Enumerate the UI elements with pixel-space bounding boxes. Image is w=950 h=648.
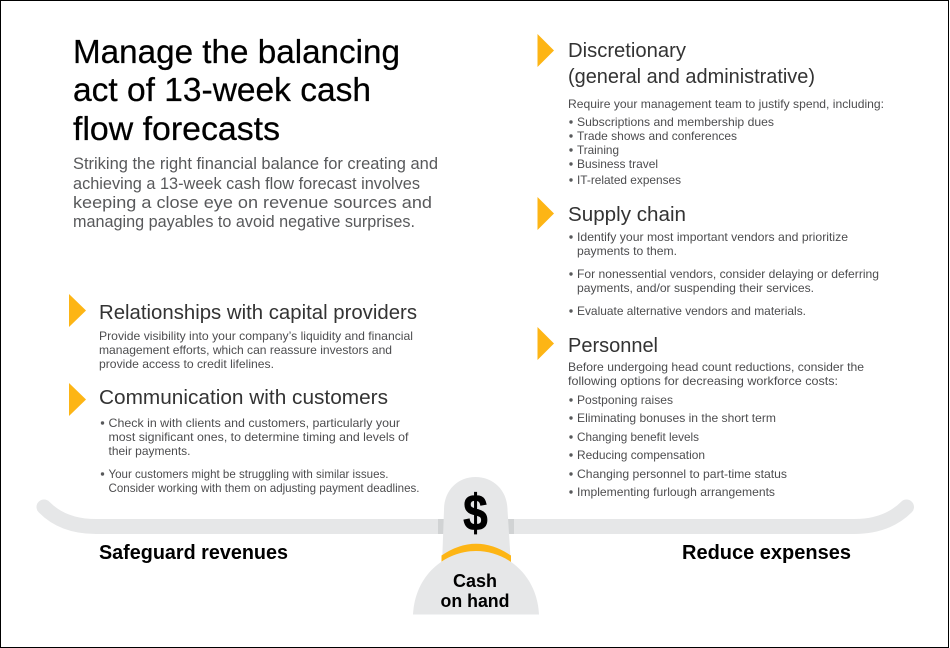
heading: relationships: Relationships with capital providers [99, 301, 417, 324]
text block: relationships: Provide visibility into your company’s liquidity and financial [99, 329, 413, 343]
beam shadow right [507, 519, 514, 534]
weight [442, 477, 511, 565]
text block: relationships: provide access to credit lifelines. [99, 357, 274, 371]
bullet list: discretionary [568, 97, 884, 187]
icon: arrow marker [69, 294, 86, 327]
bullet list: discretionary: Training [577, 143, 619, 157]
title: act of 13-week cash [73, 72, 371, 109]
bullet list: supply chain: payments, and/or suspending their services. [577, 281, 814, 295]
heading: discretionary [568, 39, 815, 88]
bullet list: personnel: Changing personnel to part-time status [577, 467, 787, 481]
heading: discretionary: Discretionary [568, 39, 687, 62]
title: Manage the balancing [73, 34, 400, 71]
bullet list: discretionary: IT-related expenses [577, 173, 681, 187]
balance beam [44, 507, 906, 526]
bullet list: supply chain [569, 230, 879, 318]
balance scale illustration [44, 477, 906, 614]
fulcrum label: on hand [440, 591, 510, 611]
bullet list: communication [101, 416, 420, 495]
bullet list: personnel: Postponing raises [577, 393, 673, 407]
heading: communication: Communication with customers [99, 386, 388, 409]
bullet list: personnel: Before undergoing head count reductions, consider the [568, 360, 864, 374]
label: safeguard revenues: Safeguard revenues [99, 542, 288, 564]
bullet list: communication: Consider working with them on adjusting payment deadlines. [108, 481, 420, 495]
title: flow forecasts [73, 111, 280, 148]
beam shadow left [438, 519, 445, 534]
bullet list: communication: most significant ones, to determine timing and levels of [108, 430, 409, 444]
bullet list: personnel: Reducing compensation [577, 448, 705, 462]
bullet list: personnel: Eliminating bonuses in the short term [577, 411, 776, 425]
icon: arrow marker [538, 34, 554, 67]
bullet list: personnel: following options for decreasing workforce costs: [568, 374, 838, 388]
bullet list: discretionary: Business travel [577, 157, 658, 171]
bullet list: supply chain: Identify your most important vendors and prioritize [577, 230, 848, 244]
bullet list: supply chain: For nonessential vendors, consider delaying or deferring [577, 267, 879, 281]
icon: arrow marker [538, 197, 554, 230]
bullet list: supply chain: payments to them. [577, 244, 677, 258]
bullet list: communication: Check in with clients and customers, particularly your [108, 416, 400, 430]
panel: personnel [538, 327, 864, 499]
text block: relationships [99, 329, 413, 371]
icon: arrow marker [538, 327, 554, 360]
intro text: Striking the right financial balance for creating and [73, 155, 438, 173]
bullet list: discretionary: Trade shows and conferences [577, 129, 737, 143]
label: reduce expenses: Reduce expenses [682, 542, 851, 564]
panel: discretionary [538, 34, 884, 187]
intro text: achieving a 13-week cash flow forecast involves [73, 175, 420, 193]
icon: arrow marker [69, 383, 86, 416]
heading: discretionary: (general and administrative) [568, 65, 815, 88]
title [73, 34, 400, 148]
fulcrum label: Cash [453, 571, 497, 591]
fulcrum label [440, 571, 510, 611]
intro text [73, 155, 438, 231]
panel: relationships with capital providers [69, 294, 417, 371]
panel: supply chain [538, 197, 879, 318]
intro text: keeping a close eye on revenue sources and [73, 194, 432, 212]
bullet list: discretionary: Subscriptions and membership dues [577, 115, 774, 129]
yellow arc [442, 544, 511, 562]
heading: supply chain: Supply chain [568, 203, 686, 226]
bullet list: communication: Your customers might be struggling with similar issues. [108, 467, 388, 481]
fulcrum base [413, 551, 539, 614]
bullet list: personnel: Implementing furlough arrangements [577, 485, 775, 499]
heading: personnel: Personnel [568, 334, 658, 357]
bullet list: discretionary: Require your management team to justify spend, including: [568, 97, 884, 111]
bullet list: communication: their payments. [108, 444, 190, 458]
text block: relationships: management efforts, which can reassure investors and [99, 343, 392, 357]
bullet list: personnel [568, 360, 864, 499]
icon: dollar sign: $ [463, 485, 488, 542]
bullet list: supply chain: Evaluate alternative vendors and materials. [577, 304, 806, 318]
intro text: managing payables to avoid negative surprises. [73, 213, 415, 231]
bullet list: personnel: Changing benefit levels [577, 430, 699, 444]
panel: communication with customers [69, 383, 420, 495]
